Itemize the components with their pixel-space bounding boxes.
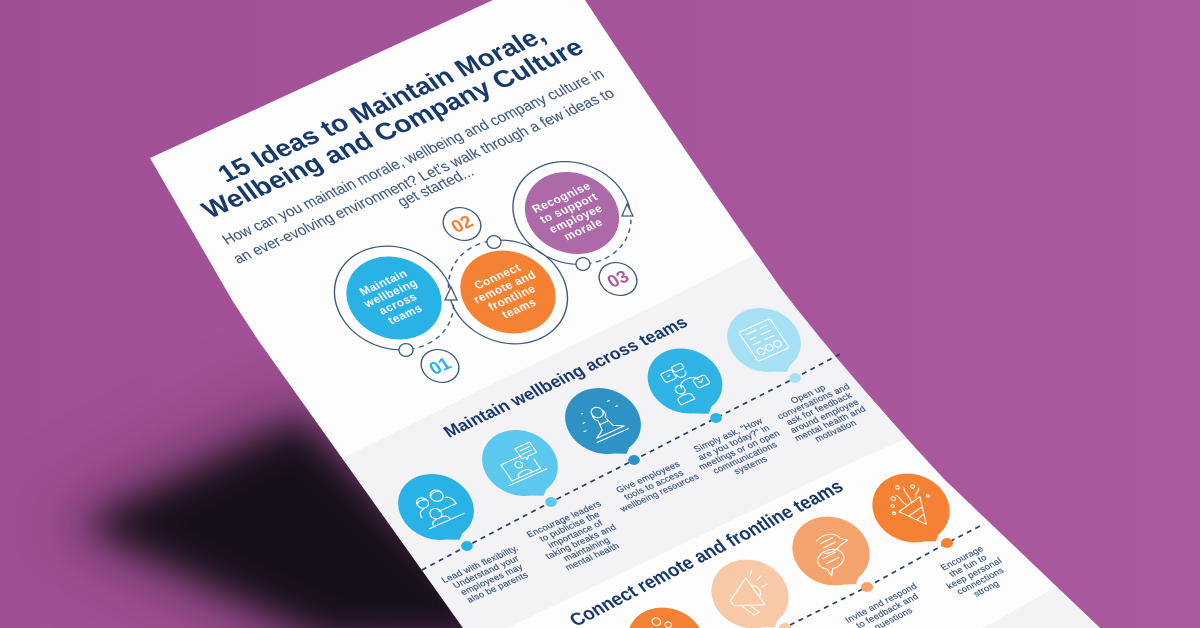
heading: connect remote and frontline teams: Connect remote and frontline teams [565, 476, 848, 628]
icon: three people [410, 485, 464, 529]
timeline nodes: connect [779, 538, 953, 628]
bubble: flexibility [384, 463, 491, 554]
title: Wellbeing and Company Culture [196, 33, 589, 224]
text: open up conversations: mental health and [792, 404, 868, 443]
title: 15 Ideas to Maintain Morale, [212, 21, 551, 188]
circle 01: maintain wellbeing: Maintain [357, 267, 410, 298]
text: give employees tools [606, 456, 701, 514]
circle 02: connect teams: teams [500, 296, 539, 321]
bubble: invite feedback [777, 504, 887, 601]
circle 03: recognise [491, 144, 653, 281]
text: encourage the fun [932, 541, 1016, 606]
bubble: megaphone [696, 547, 806, 628]
bubble: wellbeing resources [551, 377, 658, 468]
number badge 01: 01 [425, 353, 455, 379]
text: open up conversations [770, 374, 874, 451]
icon: laptop with chat [491, 442, 548, 486]
text: simply ask [685, 413, 793, 487]
circle 01: maintain wellbeing: wellbeing [361, 277, 420, 311]
text: encourage the fun: the fun to [947, 553, 989, 579]
bubble: open up conversations [713, 297, 817, 386]
text: simply ask: meetings or on open [697, 428, 782, 472]
circle 02: connect teams: remote and [471, 269, 539, 306]
icon: meditation [574, 399, 632, 444]
text: lead with flexibility: Understand your [451, 553, 521, 590]
icon: megaphone [720, 568, 780, 620]
bubble: encourage leaders [468, 419, 575, 510]
text: give employees tools: tools to access [622, 468, 686, 502]
circle 01: maintain wellbeing [312, 229, 476, 367]
circle 03: recognise: Recognise [530, 180, 594, 216]
timeline nodes: wellbeing [461, 373, 801, 551]
text: simply ask: are you today?” in [696, 423, 772, 462]
text: open up conversations: around employee [788, 397, 861, 435]
text: encourage the fun: Encourage [939, 544, 985, 572]
text: open up conversations: Open up [788, 383, 828, 405]
timeline: connect [790, 524, 984, 625]
grey section band: next section [983, 587, 1110, 628]
bubble: how are you today [633, 338, 739, 428]
circle 01: maintain wellbeing: teams [386, 302, 425, 327]
circle 02: connect teams: frontline [486, 282, 539, 314]
text: encourage the fun: keep personal [944, 556, 1004, 591]
text: lead with flexibility: employees may [458, 562, 525, 597]
grey section band: maintain wellbeing [343, 252, 910, 628]
text: give employees tools: wellbeing resources [617, 471, 701, 514]
text: encourage leaders: maintaining [561, 535, 612, 563]
text: open up conversations: conversations and [775, 382, 852, 421]
icon: speech bubbles [805, 528, 862, 578]
text: give employees tools: Give employees [614, 459, 682, 495]
paper shadow [40, 385, 520, 628]
number badge 02: 02 [447, 211, 477, 237]
circle 02: connect teams: Connect [472, 261, 524, 292]
text: open up conversations: ask for feedback [784, 390, 854, 427]
circle 03: recognise: employee [547, 202, 606, 236]
number badge 01 [414, 344, 466, 388]
heading: maintain wellbeing across teams: Maintain wellbeing across teams [439, 313, 691, 441]
circle 01: maintain wellbeing: across [376, 291, 420, 317]
text: simply ask: Simply ask, “How [691, 416, 765, 454]
text: lead with flexibility [439, 543, 538, 608]
text: lead with flexibility: Lead with flexibility. [439, 543, 521, 585]
number badge 03 [592, 257, 644, 301]
text: encourage leaders: taking breaks and [544, 522, 618, 561]
number badge 03: 03 [603, 266, 633, 292]
icon: person with gear [643, 613, 673, 628]
timeline: wellbeing [422, 353, 842, 570]
text: encourage leaders: Encourage leaders [525, 499, 604, 539]
text: encourage leaders: importance of [546, 518, 605, 550]
text: encourage the fun: strong [971, 579, 1001, 599]
circle 03: recognise: to support [537, 191, 600, 226]
icon: party popper [879, 476, 943, 534]
bubble: encourage fun [857, 461, 967, 558]
bubble: partly visible orange [612, 595, 720, 628]
number badge 02 [436, 202, 488, 246]
text: encourage leaders [525, 499, 632, 577]
intro text: How can you maintain morale, wellbeing and company culture in [219, 66, 608, 248]
icon: checklist [739, 319, 789, 361]
text: encourage the fun: connections [955, 565, 1006, 596]
infographic paper sheet [150, 0, 1100, 628]
text: open up conversations: motivation [813, 418, 858, 444]
text: encourage leaders: mental health [563, 541, 621, 572]
text: encourage leaders: to publicise the [537, 509, 602, 544]
text: lead with flexibility: also be parents [465, 570, 531, 605]
icon: people with question chat [659, 358, 715, 405]
text: invite and respond: Invite and respond [843, 581, 919, 625]
text: simply ask: systems [732, 454, 770, 476]
circle 03: recognise: morale [561, 216, 605, 243]
intro text: an ever-evolving environment? Let’s walk through a few ideas to [230, 86, 618, 267]
intro text: get started... [394, 164, 478, 210]
arrowheads and connector nodes [399, 204, 633, 356]
circle 02: connect teams [426, 223, 590, 361]
text: simply ask: communications [711, 440, 779, 476]
